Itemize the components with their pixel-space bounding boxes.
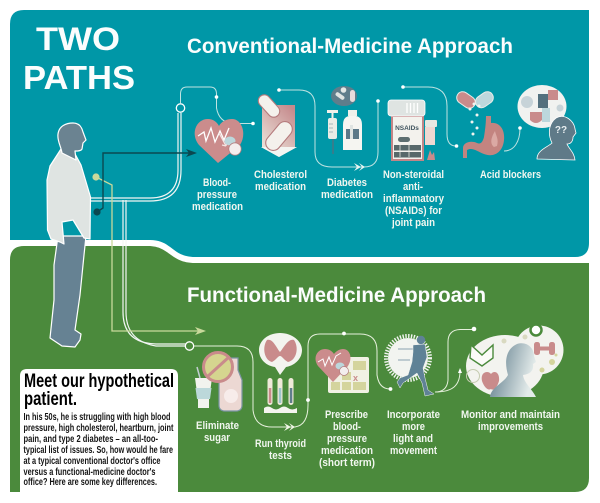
- apple: [482, 372, 499, 390]
- callout body: [24, 411, 174, 488]
- label: monitor and maintain: Monitor and maintain: [461, 409, 560, 421]
- gear: [530, 324, 542, 336]
- icon: calendar and heart: x: [353, 373, 358, 383]
- patient figure: [47, 123, 90, 347]
- label: prescribe medication: medication: [321, 445, 373, 457]
- label: prescribe medication: (short term): [319, 457, 375, 469]
- title: two paths: PATHS: [23, 59, 135, 96]
- title: two paths: TWO: [36, 21, 120, 57]
- conventional path connector: [176, 85, 522, 171]
- heading: conventional-medicine approach: Conventional-Medicine Approach: [187, 35, 513, 58]
- patient head: [58, 123, 86, 160]
- label: NSAIDs: anti-: [403, 181, 423, 193]
- title: two paths: [23, 21, 135, 96]
- label: monitor and maintain: improvements: [478, 421, 543, 433]
- label: diabetes medication: medication: [321, 189, 373, 201]
- callout heading: Meet our hypothetical: [24, 370, 174, 392]
- icon: thyroid tests: [259, 333, 302, 413]
- callout body: In his 50s, he is struggling with high blood: [24, 411, 170, 423]
- label: cholesterol medication: Cholesterol: [254, 169, 307, 181]
- icon: NSAIDs bottle: [388, 100, 437, 160]
- label: prescribe medication: pressure: [327, 433, 367, 445]
- label: blood-pressure medication: [192, 177, 243, 213]
- label: cholesterol medication: [254, 169, 307, 193]
- NSAIDs label: NSAIDs: [395, 125, 419, 132]
- callout: hypothetical patient: [20, 369, 178, 492]
- icon: calendar and heart: [316, 349, 369, 393]
- icon: cholesterol: [256, 92, 297, 157]
- label: prescribe medication: blood-: [333, 421, 361, 433]
- icon: confused patient head: ??: [555, 125, 567, 136]
- label: blood-pressure medication: medication: [192, 201, 243, 213]
- label: acid blockers: Acid blockers: [480, 169, 541, 181]
- label: diabetes medication: Diabetes: [327, 177, 367, 189]
- label: NSAIDs: [383, 169, 445, 229]
- icon: monitor and maintain: [466, 324, 564, 397]
- icon: runner and sun: [386, 336, 434, 396]
- icon: eliminate sugar: [195, 352, 242, 411]
- label: run thyroid tests: [255, 438, 306, 462]
- panel: functional medicine: [10, 246, 589, 492]
- dumbbell: [534, 342, 555, 355]
- label: blood-pressure medication: Blood-: [203, 177, 231, 189]
- functional path connector: [185, 327, 476, 431]
- label: monitor and maintain: [461, 409, 560, 433]
- label: eliminate sugar: [196, 420, 239, 444]
- icon: confused patient head: [518, 85, 576, 160]
- callout body: typical list of issues. So, how would he fare: [24, 444, 173, 456]
- callout body: versus a functional-medicine doctor's: [24, 466, 156, 478]
- label: run thyroid tests: tests: [269, 450, 292, 462]
- head profile: [490, 343, 536, 397]
- label: light and movement: more: [402, 421, 425, 433]
- patient shirt: [47, 149, 90, 244]
- open book: [470, 345, 493, 366]
- label: blood-pressure medication: pressure: [197, 189, 237, 201]
- label: NSAIDs: Non-steroidal: [383, 169, 444, 181]
- callout body: pain, and type 2 diabetes – an all-too-: [24, 433, 158, 445]
- callout heading: patient.: [24, 388, 77, 410]
- label: cholesterol medication: medication: [255, 181, 306, 193]
- callout body: at a typical conventional doctor's office: [24, 455, 161, 467]
- label: light and movement: light and: [393, 433, 433, 445]
- callout heading: [24, 370, 174, 410]
- green arrow line: [92, 173, 206, 335]
- label: light and movement: movement: [390, 445, 437, 457]
- callout body: office? Here are some key differences.: [24, 476, 157, 488]
- label: light and movement: [387, 409, 440, 457]
- label: light and movement: Incorporate: [387, 409, 440, 421]
- white paths from patient: [90, 113, 186, 346]
- label: NSAIDs: joint pain: [391, 217, 435, 229]
- patient legs: [50, 236, 86, 347]
- heading: functional-medicine approach: Functional-Medicine Approach: [187, 284, 486, 307]
- icon: diabetes medication: [327, 86, 362, 154]
- label: eliminate sugar: sugar: [204, 432, 231, 444]
- icon: acid blockers: [454, 89, 504, 158]
- labels: functional steps: [196, 409, 560, 469]
- label: NSAIDs: inflammatory: [383, 193, 445, 205]
- panel: conventional medicine: [10, 10, 589, 257]
- label: NSAIDs: (NSAIDs) for: [385, 205, 443, 217]
- dark arrow line: [93, 149, 197, 216]
- labels: conventional steps: [192, 169, 541, 229]
- label: diabetes medication: [321, 177, 373, 201]
- label: eliminate sugar: Eliminate: [196, 420, 239, 432]
- label: run thyroid tests: Run thyroid: [255, 438, 306, 450]
- callout body: pressure, high cholesterol, heartburn, joint: [24, 422, 174, 434]
- icon: heart blood pressure: [195, 119, 243, 163]
- label: prescribe medication: [319, 409, 375, 469]
- label: prescribe medication: Prescribe: [325, 409, 368, 421]
